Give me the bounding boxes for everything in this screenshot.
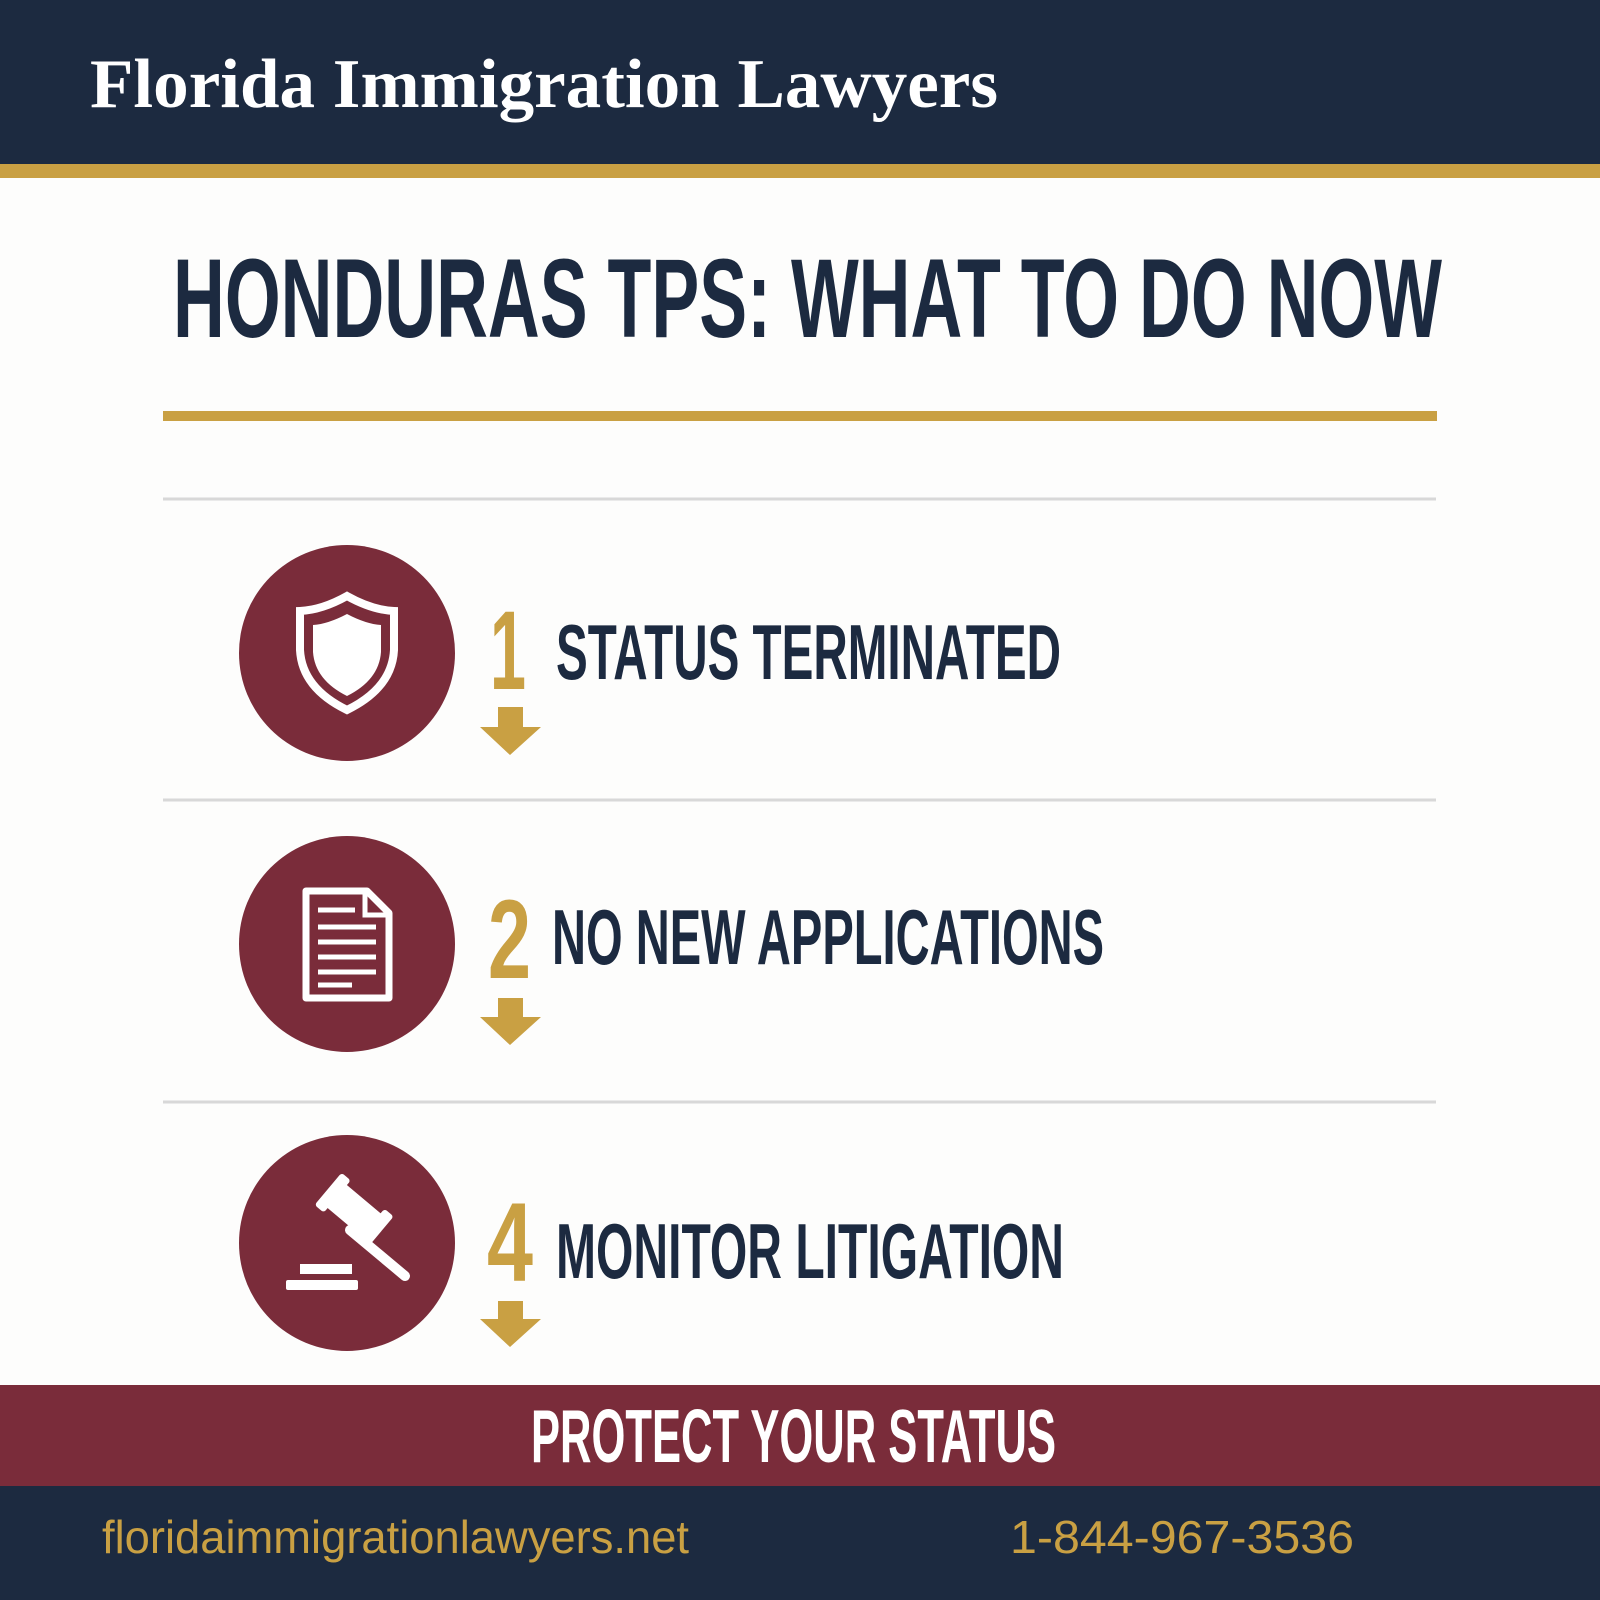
banner: protect your status: PROTECT YOUR STATUS [531, 1394, 1056, 1478]
icon: document [239, 836, 455, 1052]
arrow down [480, 1301, 541, 1347]
header: firm name: Florida Immigration Lawyers [90, 46, 998, 123]
label: MONITOR LITIGATION [556, 1207, 1064, 1295]
step 1: status terminated [239, 545, 1061, 761]
title underline [163, 411, 1437, 421]
step 2: no new applications [239, 836, 1104, 1052]
step 4: monitor litigation [239, 1135, 1064, 1351]
footer: phone: 1-844-967-3536 [1010, 1511, 1354, 1563]
number 4: 4 [487, 1180, 533, 1305]
arrow down [480, 998, 541, 1045]
number 1: 1 [490, 588, 526, 713]
footer [0, 1486, 1600, 1600]
icon: shield [239, 545, 455, 761]
label: NO NEW APPLICATIONS [552, 893, 1104, 981]
arrow down [480, 707, 541, 755]
icon: gavel [239, 1135, 455, 1351]
banner: protect your status [0, 1385, 1600, 1486]
footer: website: floridaimmigrationlawyers.net [102, 1511, 689, 1563]
header bar [0, 0, 1600, 178]
number 2: 2 [488, 877, 531, 1002]
label: STATUS TERMINATED [556, 608, 1061, 696]
